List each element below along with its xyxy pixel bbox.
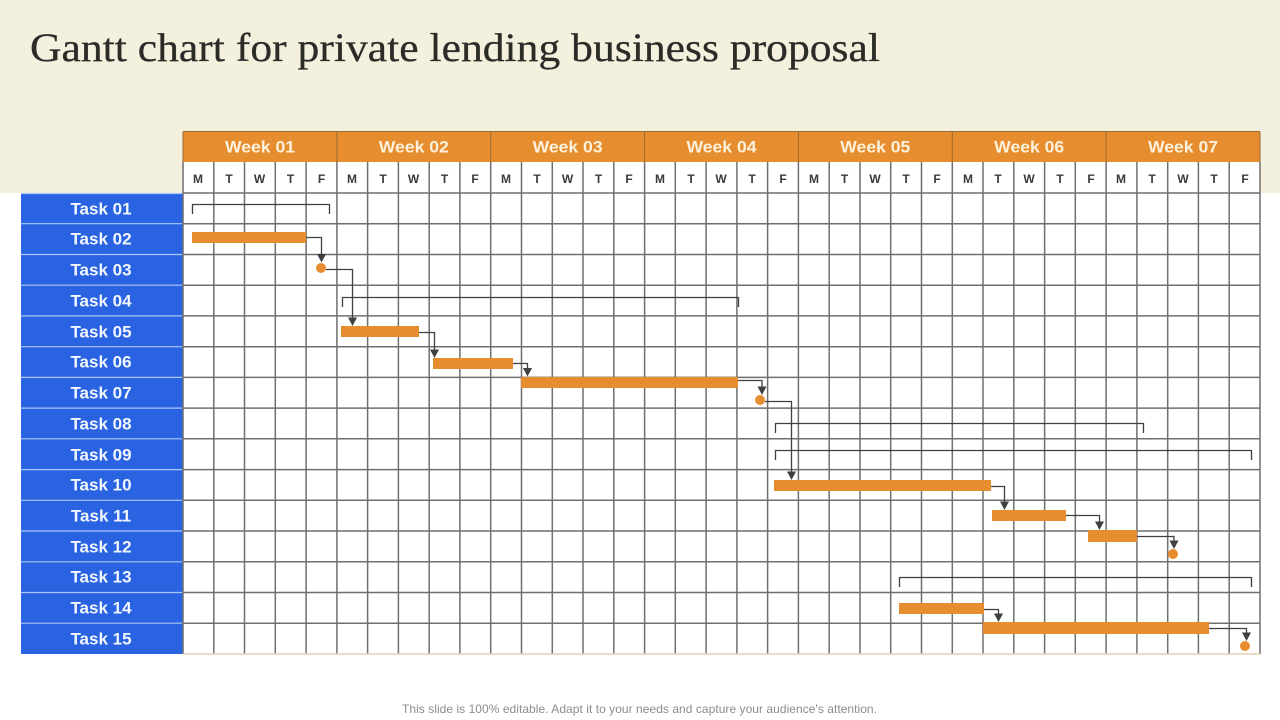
summary bracket: task 13 [900, 578, 1252, 587]
title: Gantt chart for private lending business proposal [30, 25, 880, 70]
footer note: This slide is 100% editable. Adapt it to your needs and capture your audience's attention. [402, 702, 877, 716]
summary bracket: task 09 [776, 450, 1252, 460]
week header row: Week 04 [686, 138, 757, 156]
task name column: Task 09 [70, 446, 132, 464]
bar: task 02 [192, 232, 306, 243]
day header row: T [441, 172, 449, 186]
summary bracket: task 04 [342, 298, 738, 307]
day header row: F [933, 172, 941, 186]
arrow: task 15 to milestone [1209, 628, 1251, 641]
week header row: Week 06 [994, 138, 1064, 156]
week header row: Week 05 [840, 138, 910, 156]
gantt grid [183, 162, 1260, 654]
day header row: W [715, 172, 727, 186]
arrow: task 05 to task 06 [419, 332, 439, 358]
arrow: task 03 to task 05 [326, 270, 357, 326]
task name column: Task 06 [70, 352, 132, 372]
bar: task 14 [899, 603, 984, 614]
week header row: Week 03 [533, 138, 603, 156]
day header row: M [501, 172, 511, 186]
bar: task 06 [433, 358, 513, 369]
task name column: Task 03 [70, 260, 132, 280]
title banner background [0, 0, 1280, 193]
day header row: M [347, 172, 357, 186]
arrow: task 14 to task 15 [984, 610, 1003, 622]
bar: task 07 [521, 377, 738, 388]
day header row: T [1056, 172, 1064, 186]
day header row: M [193, 172, 203, 186]
arrow: task 10 to task 11 [991, 486, 1009, 510]
bar: task 10 [774, 480, 991, 491]
task name column: Task 15 [70, 630, 132, 648]
task name column: Task 07 [70, 384, 132, 402]
day header row: T [595, 172, 603, 186]
day header row: W [869, 172, 881, 186]
day header row: F [1241, 172, 1249, 186]
day header row: T [1148, 172, 1156, 186]
arrow: task 02 to task 03 [306, 238, 326, 262]
week header row: Week 01 [225, 138, 295, 156]
task name column: Task 10 [70, 476, 132, 494]
day header row: W [1177, 172, 1189, 186]
week header row [183, 132, 1260, 162]
day header row: W [254, 172, 266, 186]
day header row: T [687, 172, 695, 186]
task name column: Task 05 [70, 322, 132, 342]
day header row: M [1116, 172, 1126, 186]
task name column: Task 02 [70, 230, 132, 248]
day header row: F [1087, 172, 1095, 186]
day header row: T [902, 172, 910, 186]
bar: task 12 [1088, 530, 1137, 542]
bar: task 05 [341, 326, 419, 337]
day header row: W [1023, 172, 1035, 186]
task name column: Task 01 [70, 200, 132, 218]
day header row: T [841, 172, 849, 186]
arrow: milestone to task 10 [765, 402, 796, 480]
task name column: Task 12 [70, 538, 132, 556]
day header row: T [533, 172, 541, 186]
milestone: task 03 [316, 263, 326, 273]
arrow: task 06 to task 07 [513, 364, 532, 376]
week header row: Week 07 [1148, 138, 1218, 156]
day header row: M [809, 172, 819, 186]
day header row: T [379, 172, 387, 186]
day header row: M [963, 172, 973, 186]
day header row: W [562, 172, 574, 186]
day header row: T [287, 172, 295, 186]
bar: task 11 [992, 510, 1066, 521]
day header row: W [408, 172, 420, 186]
task name column: Task 11 [71, 506, 131, 526]
arrow: task 07 to milestone [738, 380, 766, 395]
arrow: task 11 to task 12 [1066, 516, 1104, 530]
milestone: task 15 [1240, 641, 1250, 651]
day header row: F [625, 172, 633, 186]
arrow: task 12 to milestone [1137, 536, 1178, 549]
milestone: task 12 [1168, 549, 1178, 559]
summary bracket: task 01 [192, 204, 330, 214]
task name column: Task 14 [70, 598, 132, 618]
day header row: M [655, 172, 665, 186]
milestone: task 07 [755, 395, 765, 405]
day header row [183, 162, 1260, 193]
bar: task 15 [983, 622, 1209, 634]
task name column: Task 13 [70, 568, 132, 586]
day header row: F [471, 172, 479, 186]
day header row: T [994, 172, 1002, 186]
task name column: Task 04 [70, 292, 132, 310]
summary bracket: task 08 [776, 424, 1144, 433]
task name column: Task 08 [70, 414, 132, 434]
day header row: F [318, 172, 325, 186]
day header row: T [748, 172, 756, 186]
day header row: F [779, 172, 787, 186]
day header row: T [1210, 172, 1218, 186]
week header row: Week 02 [379, 138, 449, 156]
task name column [21, 193, 183, 654]
day header row: T [225, 172, 233, 186]
